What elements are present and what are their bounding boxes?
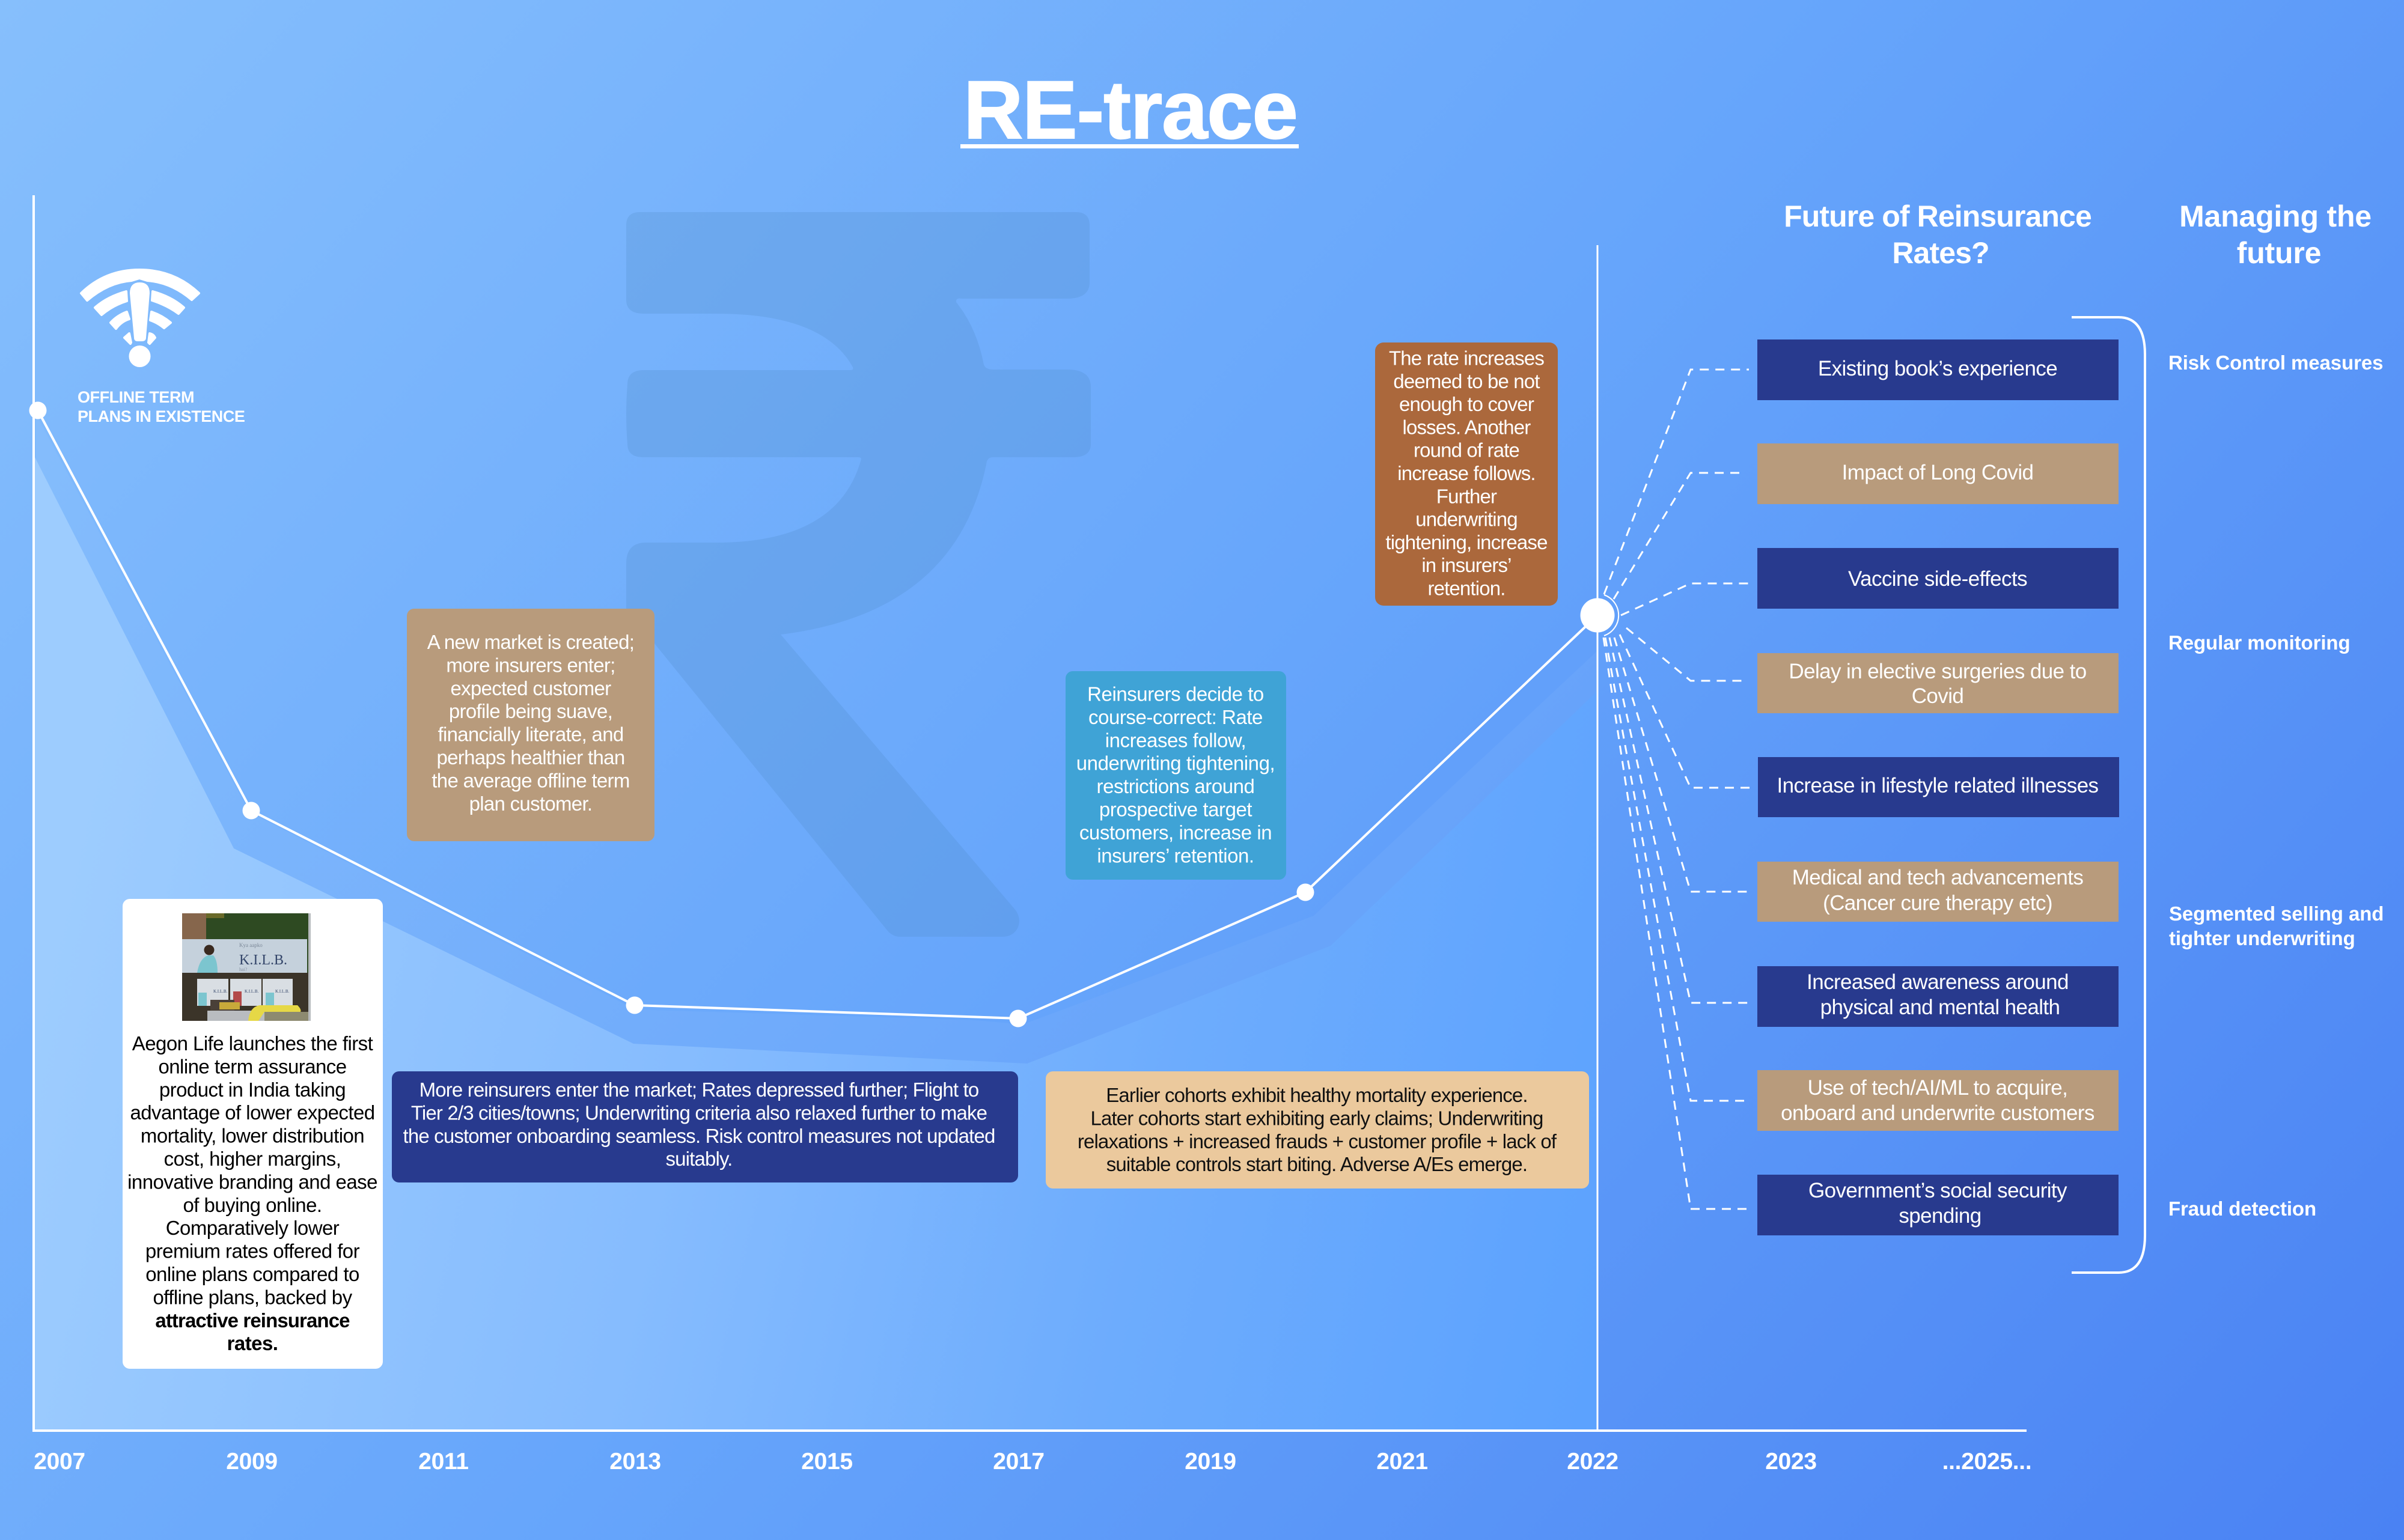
callout: Aegon Life launch: of buying online. [183,1194,322,1216]
callout: new market created: expected customer [451,677,611,699]
callout: further rate increases [1375,342,1558,606]
factor: vaccine side-effects: Vaccine side-effects [1848,567,2027,591]
callout: Aegon Life launch: online term assurance [158,1055,347,1077]
factor: lifestyle illnesses: Increase in lifestyle related illnesses [1777,774,2099,797]
label: offline term plans: OFFLINE TERM [78,388,194,406]
factor: government spending: spending [1899,1204,1981,1228]
callout: reinsurers course-correct: Reinsurers decide to [1087,683,1264,705]
callout: cohorts experience: Earlier cohorts exhibit healthy mortality experience. [1106,1084,1528,1106]
factor: tech AI ML: Use of tech/AI/ML to acquire, [1808,1076,2067,1100]
factor: existing book's experience: Existing book’s experience [1818,357,2057,380]
factor: awareness of health [1757,966,2119,1027]
callout: new market created [407,609,654,841]
label: segmented selling: Segmented selling and [2169,902,2384,925]
callout: Aegon Life launch: premium rates offered for [145,1240,360,1262]
callout: Aegon Life launch: innovative branding and ease [127,1170,377,1193]
factor: medical and tech advancements [1757,862,2119,922]
label: offline term plans: PLANS IN EXISTENCE [78,407,245,425]
callout: cohorts experience: Later cohorts start exhibiting early claims; Underwriting [1090,1107,1543,1129]
photo: K.I.L.B. billboard: K.I.L.B. [245,989,259,994]
label: segmented selling: tighter underwriting [2169,927,2355,949]
callout: further rate increases: increase follows. [1397,462,1536,484]
marker: 2022 point [1581,595,1618,636]
x-axis year labels [34,1449,2031,1475]
callout: reinsurers course-correct: insurers’ retention. [1097,844,1254,866]
callout: reinsurers course-correct: underwriting tightening, [1076,752,1275,775]
x-axis year labels: 2013 [609,1449,661,1475]
chart: 2022 divider line [1596,245,1599,1431]
callout: Aegon Life launch: mortality, lower distribution [141,1125,364,1147]
callout: further rate increases: enough to cover [1399,393,1534,415]
factor: delay in elective surgeries [1757,653,2119,713]
factor: tech AI ML [1757,1070,2119,1131]
callout: new market created: A new market is created; [427,631,634,653]
photo: K.I.L.B. billboard [182,913,311,1021]
chart: trend line with points [29,401,1597,1027]
photo: K.I.L.B. billboard: Kya aapko [239,942,263,948]
callout: Aegon Life launch: attractive reinsurance [155,1309,350,1332]
callout: Aegon Life launch: advantage of lower expected [130,1101,375,1124]
callout: new market created: plan customer. [469,793,592,815]
callout: new market created: profile being suave, [449,700,612,722]
callout: more reinsurers enter [392,1071,1018,1182]
x-axis year labels: 2019 [1185,1449,1236,1475]
chart: shaded band under the line [34,415,1597,1431]
heading: managing the future: future [2237,236,2321,270]
callout: reinsurers course-correct: customers, increase in [1079,821,1272,844]
factor: vaccine side-effects [1757,548,2119,609]
x-axis year labels: 2022 [1567,1449,1618,1475]
callout: further rate increases: underwriting [1415,508,1518,531]
factor: long covid [1757,443,2119,504]
x-axis year labels: 2011 [418,1449,469,1475]
callout: Aegon Life launch: rates. [227,1332,278,1354]
callout: cohorts experience [1046,1071,1589,1188]
factor: delay in elective surgeries: Covid [1912,684,1963,708]
factor: medical and tech advancements: Medical and tech advancements [1792,866,2083,889]
callout: Aegon Life launch: product in India taking [159,1079,346,1101]
photo: K.I.L.B. billboard: K.I.L.B. [275,989,290,994]
callout: Aegon Life launch: Comparatively lower [166,1217,340,1239]
chart: vertical axis [32,195,35,1432]
photo: K.I.L.B. billboard: K.I.L.B. [213,989,228,994]
callout: reinsurers course-correct: increases follow, [1105,729,1246,751]
callout: more reinsurers enter: More reinsurers enter the market; Rates depressed further; Flight to [419,1079,978,1101]
label: fraud detection: Fraud detection [2168,1198,2316,1220]
callout: reinsurers course-correct: restrictions around [1097,775,1254,797]
callout: reinsurers course-correct: prospective target [1099,798,1252,821]
callout: Aegon Life launch [123,899,383,1369]
callout: Aegon Life launch: online plans compared to [145,1263,359,1285]
title: RE-trace [963,64,1298,156]
callout: new market created: more insurers enter; [446,654,615,676]
callout: Aegon Life launch: Aegon Life launches the first [132,1032,373,1055]
callout: new market created: perhaps healthier than [436,746,625,768]
dashed connectors from 2022 [1603,370,1750,1209]
callout: reinsurers course-correct [1066,671,1286,880]
callout: cohorts experience: relaxations + increased frauds + customer profile + lack of [1078,1130,1557,1152]
callout: further rate increases: tightening, increase [1385,531,1548,553]
callout: further rate increases: Further [1436,485,1497,507]
x-axis year labels: 2021 [1376,1449,1428,1475]
watermark: rupee symbol [626,212,1091,937]
callout: further rate increases: in insurers’ [1421,554,1512,576]
x-axis year labels: 2015 [801,1449,853,1475]
factor: awareness of health: Increased awareness around [1807,970,2069,994]
factor: medical and tech advancements: (Cancer cure therapy etc) [1823,892,2052,915]
factor: long covid: Impact of Long Covid [1842,461,2033,484]
heading: managing the future: Managing the [2179,199,2372,233]
label: offline term plans [78,388,245,425]
x-axis year labels: 2023 [1765,1449,1817,1475]
factor: delay in elective surgeries: Delay in elective surgeries due to [1789,660,2087,683]
bracket [2072,317,2145,1273]
chart: light area fill [34,456,1597,1431]
icon: wifi with exclamation mark [81,270,199,366]
factor: lifestyle illnesses [1758,757,2119,817]
label: regular monitoring: Regular monitoring [2168,632,2351,654]
callout: more reinsurers enter: Tier 2/3 cities/towns; Underwriting criteria also relaxed further to make [411,1101,987,1124]
callout: further rate increases: The rate increases [1389,347,1544,369]
photo: K.I.L.B. billboard: hai? [239,967,248,972]
heading: future of reinsurance rates: Future of Reinsurance [1784,199,2091,233]
heading: future of reinsurance rates: Rates? [1892,236,1989,270]
x-axis year labels: 2017 [993,1449,1045,1475]
callout: further rate increases: deemed to be not [1393,370,1540,392]
callout: further rate increases: retention. [1427,577,1506,600]
callout: new market created: financially literate, and [438,723,624,746]
callout: Aegon Life launch: offline plans, backed by [153,1286,353,1308]
x-axis year labels: 2007 [34,1449,85,1475]
callout: further rate increases: losses. Another [1403,416,1531,438]
callout: Aegon Life launch: cost, higher margins, [164,1148,341,1170]
callout: more reinsurers enter: suitably. [666,1148,732,1170]
callout: more reinsurers enter: the customer onboarding seamless. Risk control measures not updated [403,1125,995,1147]
x-axis year labels: ...2025... [1942,1449,2031,1475]
photo: K.I.L.B. billboard: K.I.L.B. [239,952,287,968]
factor: awareness of health: physical and mental health [1820,996,2060,1019]
callout: cohorts experience: suitable controls start biting. Adverse A/Es emerge. [1106,1153,1527,1175]
factor: existing book's experience [1757,339,2119,400]
factor: tech AI ML: onboard and underwrite customers [1781,1101,2094,1125]
label: risk control measures: Risk Control measures [2168,352,2383,374]
factor: government spending: Government’s social security [1808,1179,2067,1202]
callout: further rate increases: round of rate [1414,439,1519,461]
chart: horizontal axis [32,1429,2027,1432]
x-axis year labels: 2009 [226,1449,278,1475]
callout: new market created: the average offline term [432,769,630,791]
callout: reinsurers course-correct: course-correct: Rate [1088,706,1263,728]
factor: government spending [1757,1175,2119,1235]
